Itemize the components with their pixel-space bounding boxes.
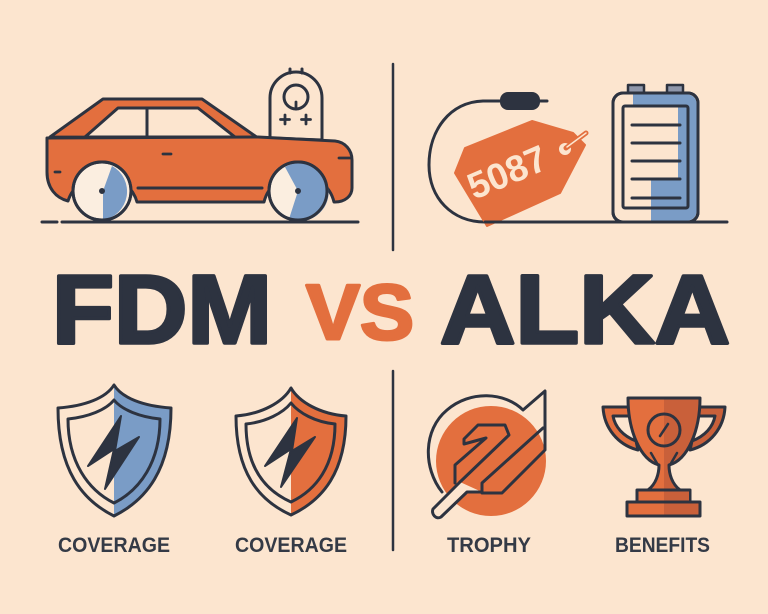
icon: battery with lines — [485, 85, 727, 222]
car body — [47, 137, 352, 202]
title: FDM VS ALKA: ALKA — [440, 255, 730, 364]
icon: battery behind car — [270, 69, 322, 140]
price number: 5087 — [461, 138, 553, 207]
right wheel — [269, 162, 329, 221]
cable and plug — [429, 92, 547, 222]
title: FDM VS ALKA — [52, 255, 730, 364]
icon: blue shield — [58, 385, 171, 516]
price tag — [455, 121, 586, 226]
label: trophy: TROPHY — [447, 534, 531, 557]
icon: orange shield — [236, 388, 346, 515]
icon: trophy cup — [603, 398, 725, 516]
icon: car with battery — [42, 69, 358, 222]
trophy bowl and stem — [628, 398, 664, 490]
left wheel — [73, 162, 131, 220]
trophy gauge — [648, 414, 680, 446]
label: coverage: COVERAGE — [58, 534, 170, 557]
title: FDM VS ALKA: VS — [306, 268, 414, 356]
title: FDM VS ALKA: FDM — [52, 255, 272, 364]
ground line — [42, 220, 358, 224]
icon: circular emblem — [428, 391, 546, 518]
icon: price tag on cable — [429, 92, 586, 226]
label: benefits: BENEFITS — [615, 534, 710, 557]
label: coverage: COVERAGE — [235, 534, 347, 557]
car roof and windows — [50, 99, 258, 138]
trophy handles — [603, 407, 638, 450]
trophy base — [627, 490, 700, 516]
